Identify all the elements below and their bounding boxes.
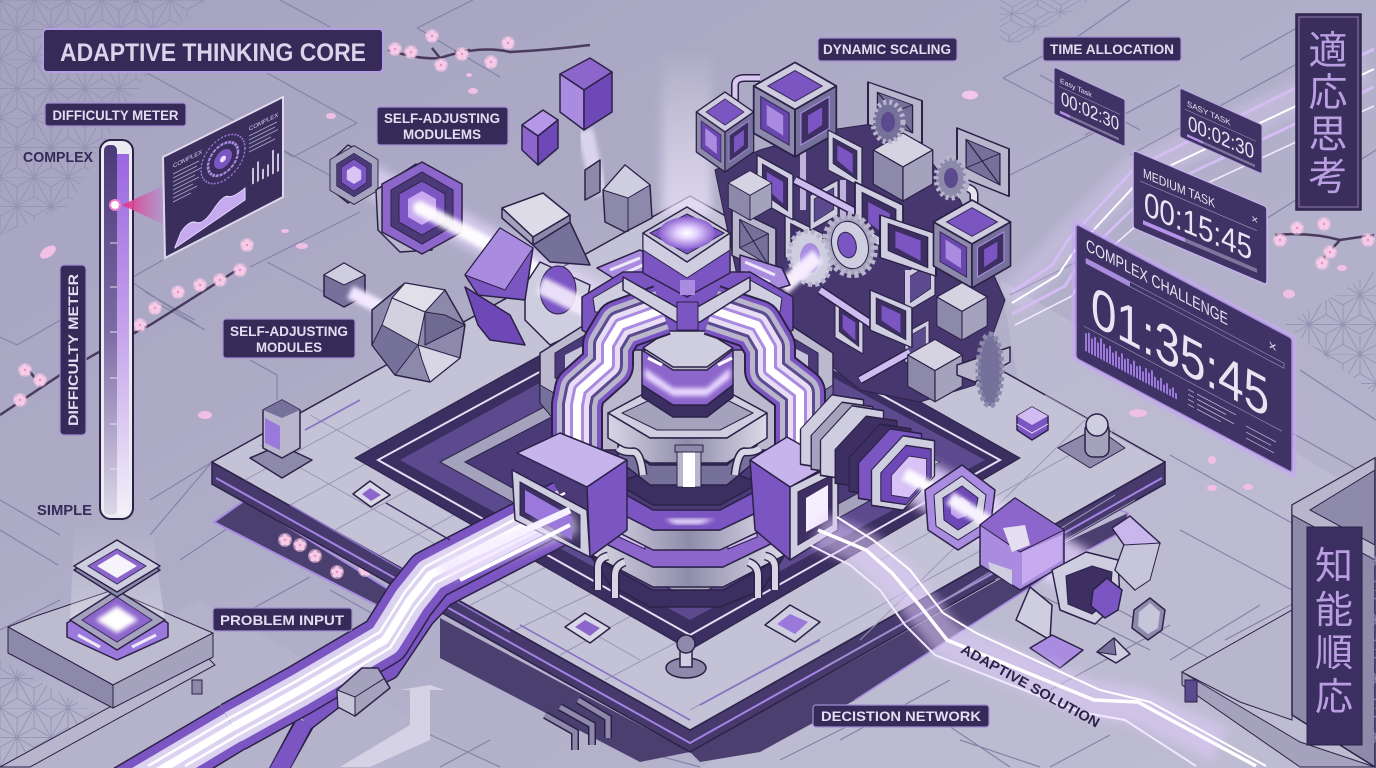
timer: easy task 1: 00:02:30 [1061,88,1119,136]
label: self-adjusting modulems [377,107,508,145]
icon: knob right [1058,414,1125,468]
timer: medium task: 00:15:45 [1144,184,1252,268]
cube stack centre [855,82,936,348]
sign: top right banner: 思 [1308,114,1348,157]
beam: pale layer [132,505,565,768]
icon: connector box on beam [337,668,390,716]
label: decistion network [813,705,989,727]
icon: top purple cube [560,58,612,130]
timer: medium task: MEDIUM TASK [1143,166,1215,211]
dashboard heading right: COMPLEX [249,111,279,133]
beam: outer dark edge [113,505,565,768]
icon: under pipes [545,700,608,750]
core: neck [623,277,750,330]
upper device [74,540,160,597]
label: vertical difficulty meter [60,265,86,435]
dynamic scaling machinery [696,62,1010,406]
timer: medium task: ✕ [1251,213,1259,226]
central core [113,207,838,768]
label: decistion network: DECISTION NETWORK [821,708,981,724]
label: self-adjusting modulems: MODULEMS [403,126,481,142]
pointer [122,186,163,224]
core: right block [750,437,838,560]
core: left block [440,433,627,580]
dashboard text lines [173,122,278,202]
slab [8,590,213,685]
icon: gear with beam [784,227,836,289]
sign: chinoiserie panel: 能 [1315,590,1353,632]
sign: chinoiserie panel: 知 [1315,546,1353,588]
icon: gear bottom [978,334,1002,406]
label: self-adjusting modules: SELF-ADJUSTING [230,323,348,339]
label: dynamic scaling [818,38,957,61]
icon: small purple cube [522,110,558,165]
dashboard heading left: COMPLEX [173,148,203,170]
pipes in machinery [735,78,974,380]
timer: easy task 1: Easy Task [1060,76,1092,99]
meter marker [110,200,120,210]
timer: complex challenge [1073,219,1295,477]
icon: gear right [936,158,966,198]
back structure frames [732,150,935,363]
core: centre pillar [618,445,760,487]
icon: gear upper [873,102,903,142]
icon: sensor tower left [250,400,312,478]
timer: easy task 2 [1180,88,1262,174]
label: self-adjusting modules [223,319,355,358]
wall pattern [1362,555,1376,745]
label: self-adjusting modules: MODULES [256,339,322,355]
label: vertical difficulty meter: DIFFICULTY METER [65,274,81,426]
icon: hex ring [925,465,1000,550]
label: complex: COMPLEX [23,149,93,166]
label: adaptive solution: ADAPTIVE SOLUTION [958,641,1103,730]
dashboard panel [163,97,283,258]
beam: adaptive solution path [810,517,1266,766]
timer: complex challenge: 01:35:45 [1091,273,1269,430]
small platform devices [250,400,1125,750]
cherry branch top [388,29,590,94]
icon: chip left [353,481,450,540]
floor arrow mark [340,685,445,767]
core: back wings [597,250,790,300]
cube stack upper left [696,62,862,220]
cherry branch right [962,90,1375,491]
beam: core to gear [782,256,818,288]
icon: barrel [800,380,934,525]
platform recess [355,272,1020,650]
timer: easy task 1 [1054,67,1125,147]
label: time allocation: TIME ALLOCATION [1050,41,1174,57]
modules: self-adjusting group upper [330,145,600,300]
icon: chip centre right [765,605,820,642]
core: upper ring [582,272,793,350]
icon: stacked cube [1017,407,1048,440]
sign: top right banner [1296,14,1361,210]
bottom-right building [1182,458,1376,767]
meter outline [100,140,133,519]
sign: top right banner: 応 [1308,72,1348,115]
light column [70,520,165,620]
platform [212,196,1165,752]
icon: hex prism [980,498,1064,590]
background pattern: asanoha right [1285,270,1376,395]
core: top cap [643,207,730,297]
wall [1292,458,1375,767]
problem input base [0,520,215,767]
ledge [0,655,215,767]
title [43,29,383,72]
label: problem input [213,608,352,631]
background pattern: top square motif [1000,0,1090,45]
label: problem input: PROBLEM INPUT [220,612,344,628]
sign: top right banner: 考 [1308,156,1348,199]
timer: easy task 2: 00:02:30 [1188,111,1254,164]
cherry branch left [0,113,336,419]
lower device [67,590,168,660]
icon: grey prism [603,165,652,232]
background pattern: asanoha top-left [0,0,205,235]
timer: easy task 2: SASY TASK [1187,99,1231,128]
core: small side tubes [598,556,775,598]
sign: chinoiserie panel: 応 [1315,677,1353,719]
modules: lower hex and polyhedron [324,263,465,382]
title: ADAPTIVE THINKING CORE [60,39,366,67]
icon: large hex module [376,162,462,254]
gears [782,102,1002,406]
icon: floating fragments [465,160,640,345]
core: lower tiers [590,393,785,607]
beam: output [880,460,1080,572]
difficulty meter [100,140,163,519]
beam: cube to prism [585,130,600,195]
label: dynamic scaling: DYNAMIC SCALING [823,41,951,57]
icon: polyhedron ball [372,283,465,382]
background pattern: asanoha bottom-left [0,660,100,768]
icon: gear large [819,210,881,280]
beam: white core [156,505,565,768]
data traces top right [1012,49,1374,325]
beam: lower branch [269,535,565,768]
timer: medium task [1133,150,1267,285]
walkway [1182,610,1292,720]
cube stack right [908,128,1010,402]
sign: top right banner: 適 [1308,30,1348,73]
core: right pipe [712,310,800,465]
label: simple: SIMPLE [37,502,92,519]
icon: lower hex [324,263,365,307]
beam: purple layer [116,505,565,768]
icon: chip centre left [565,613,610,643]
meter fill left [104,145,117,515]
dashboard bars [253,148,278,184]
core: purple tier [642,331,733,417]
dashboard mandala [201,126,245,192]
label: difficulty meter [45,103,186,126]
modules: top cubes and prism [465,58,652,345]
timer: complex challenge: ✕ [1268,338,1277,355]
label: self-adjusting modulems: SELF-ADJUSTING [384,110,500,126]
icon: small hex module [330,145,378,204]
timer: complex challenge: COMPLEX CHALLENGE [1086,235,1228,329]
sign: chinoiserie panel [1307,527,1362,745]
core: input beam band [113,493,565,768]
sign: chinoiserie panel: 順 [1315,633,1353,675]
icon: joystick [666,635,706,678]
dashboard area chart [175,187,245,248]
core: left pipe [577,310,662,465]
icon: end hex [1052,552,1122,624]
core: outer ring [540,315,833,450]
meter fill right [117,154,129,515]
beam: upper module into core [360,175,600,300]
label: time allocation [1043,37,1181,61]
output barrel and solution modules [800,380,1266,766]
label: difficulty meter: DIFFICULTY METER [52,107,178,123]
dark shadow under platform [214,490,1128,762]
icon: scattered fragments [1016,516,1165,668]
module: vertical core beam [662,55,712,215]
